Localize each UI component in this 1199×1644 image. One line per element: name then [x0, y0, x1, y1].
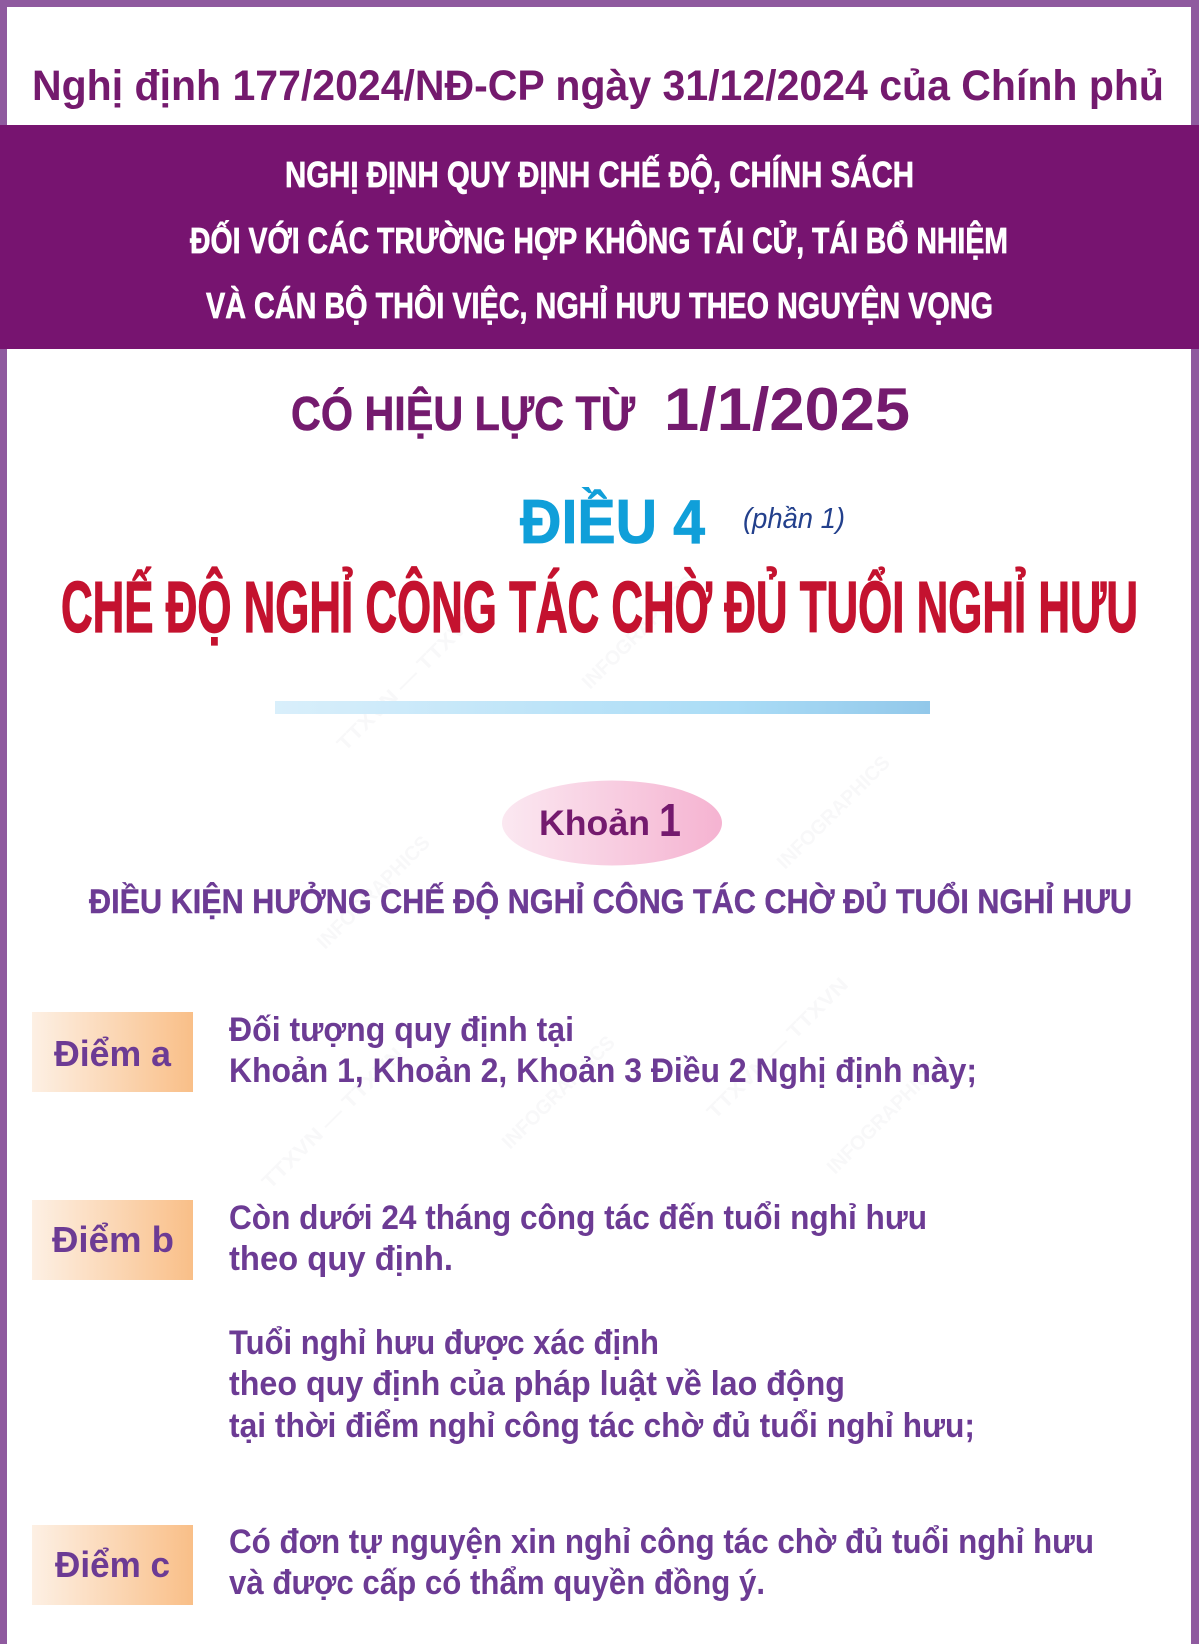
- item: Điểm a: Đối tượng quy định tại: [229, 1011, 574, 1049]
- item: Điểm b: Còn dưới 24 tháng công tác đến tuổi nghỉ hưu: [229, 1199, 927, 1237]
- item: Điểm c: và được cấp có thẩm quyền đồng ý.: [229, 1564, 765, 1602]
- item: Điểm b: Điểm b: [52, 1219, 174, 1260]
- badge: Khoản 1: 1: [659, 794, 681, 846]
- gradient divider bar: [275, 701, 930, 714]
- item: Điểm b: tại thời điểm nghỉ công tác chờ đủ tuổi nghỉ hưu;: [229, 1407, 975, 1445]
- effective date: 1/1/2025: [664, 376, 910, 443]
- infographic canvas: INFOGRAPHICS: [313, 832, 435, 954]
- infographic canvas: INFOGRAPHICS: [498, 1032, 620, 1154]
- item: Điểm b: theo quy định của pháp luật về lao động: [229, 1365, 845, 1403]
- item: Điểm a: Điểm a: [54, 1033, 172, 1074]
- infographic canvas: INFOGRAPHICS: [823, 1057, 945, 1179]
- badge: Khoản 1: Khoản: [539, 804, 650, 843]
- item: Điểm a: Khoản 1, Khoản 2, Khoản 3 Điều 2 Nghị định này;: [229, 1052, 977, 1090]
- banner: decree subject: ĐỐI VỚI CÁC TRƯỜNG HỢP KHÔNG TÁI CỬ, TÁI BỔ NHIỆM: [190, 218, 1008, 261]
- item: Điểm c: [32, 1523, 1094, 1605]
- infographic canvas: TTXVN — TTXVN: [333, 606, 483, 756]
- article number: [520, 488, 845, 557]
- infographic canvas: INFOGRAPHICS: [578, 572, 700, 694]
- item: Điểm b: theo quy định.: [229, 1240, 453, 1278]
- banner: decree subject: VÀ CÁN BỘ THÔI VIỆC, NGHỈ HƯU THEO NGUYỆN VỌNG: [206, 284, 993, 326]
- item: Điểm b: [32, 1199, 975, 1445]
- item: Điểm b: Tuổi nghỉ hưu được xác định: [229, 1324, 659, 1362]
- badge: Khoản 1: [502, 780, 722, 866]
- infographic canvas: TTXVN — TTXVN: [258, 1044, 408, 1194]
- effective date: CÓ HIỆU LỰC TỪ: [291, 386, 635, 441]
- item: Điểm a: [32, 1011, 977, 1092]
- effective date: [291, 376, 910, 443]
- item: Điểm c: Điểm c: [55, 1544, 170, 1585]
- banner: decree subject: [0, 125, 1199, 349]
- article number: ĐIỀU 4: [520, 488, 705, 557]
- title: decree reference: Nghị định 177/2024/NĐ-CP ngày 31/12/2024 của Chính phủ: [32, 62, 1164, 110]
- item: Điểm c: Có đơn tự nguyện xin nghỉ công tác chờ đủ tuổi nghỉ hưu: [229, 1523, 1094, 1561]
- infographic canvas: INFOGRAPHICS: [773, 752, 895, 874]
- banner: decree subject: NGHỊ ĐỊNH QUY ĐỊNH CHẾ ĐỘ, CHÍNH SÁCH: [285, 153, 914, 195]
- infographic canvas: TTXVN — TTXVN: [703, 974, 853, 1124]
- article number: (phần 1): [743, 503, 845, 535]
